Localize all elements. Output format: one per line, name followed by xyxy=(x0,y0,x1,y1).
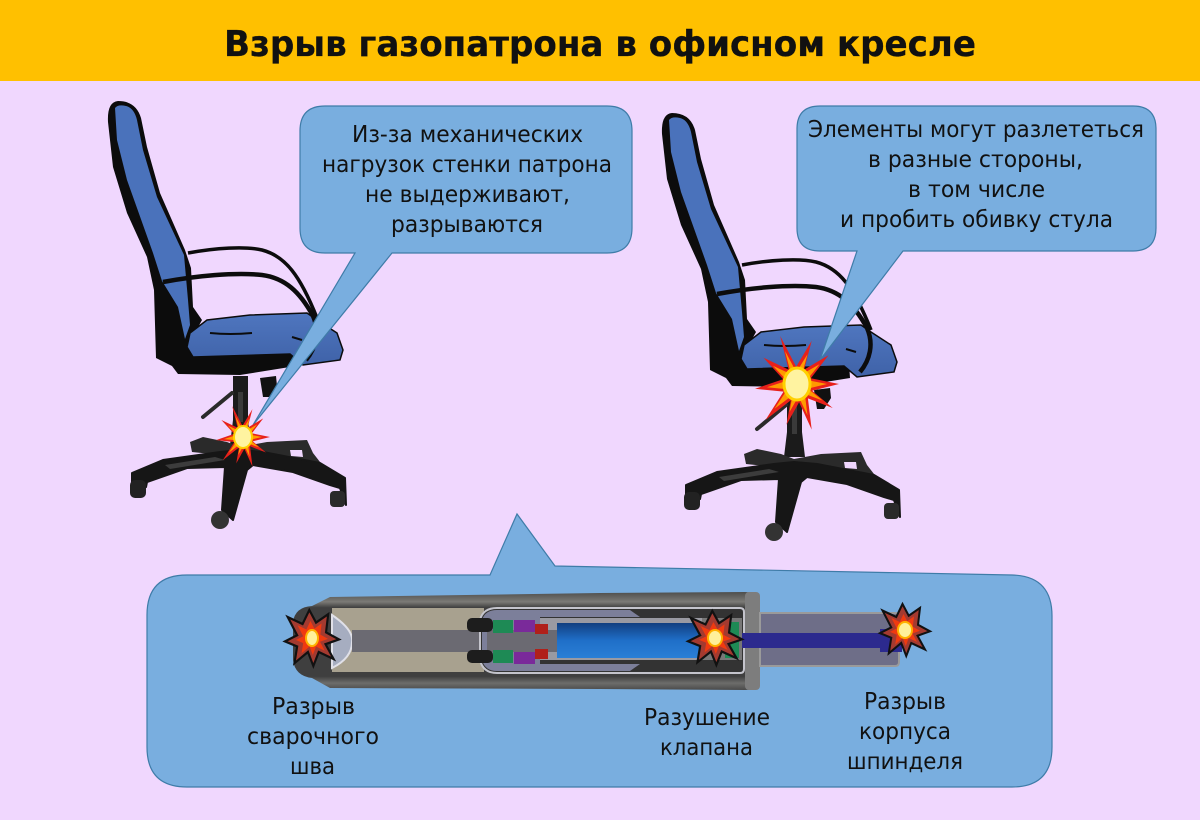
explosion on right chair under the seat xyxy=(755,336,839,430)
label: weld rupture: сварочного xyxy=(247,724,379,750)
callout text: right: Элементы могут разлететься xyxy=(808,117,1144,143)
label: valve destruction: клапана xyxy=(660,735,753,761)
gas cartridge cutaway xyxy=(293,592,902,690)
callout text: right: в том числе xyxy=(908,177,1045,203)
callout text: left: Из-за механических xyxy=(352,122,583,148)
title: Взрыв газопатрона в офисном кресле xyxy=(224,24,976,65)
callout text: left: разрываются xyxy=(391,212,543,238)
label: valve destruction: Разушение xyxy=(644,705,770,731)
callout: right xyxy=(797,106,1156,360)
callout text: right: в разные стороны, xyxy=(868,147,1083,173)
callout text: right xyxy=(808,117,1144,233)
label: weld rupture: шва xyxy=(290,754,335,780)
callout: left xyxy=(253,106,632,425)
explosion: welded seam xyxy=(285,610,339,666)
callout text: right: и пробить обивку стула xyxy=(840,207,1113,233)
explosion: spindle xyxy=(880,604,930,656)
explosion: valve xyxy=(688,611,742,665)
title banner xyxy=(0,0,1200,81)
label: spindle rupture: Разрыв xyxy=(864,689,946,715)
label: valve destruction xyxy=(644,705,770,761)
label: weld rupture: Разрыв xyxy=(272,694,355,720)
explosion on left chair at the base xyxy=(216,406,270,466)
callout text: left xyxy=(322,122,612,238)
right chair illustration xyxy=(662,113,900,541)
callout text: left: нагрузок стенки патрона xyxy=(322,152,612,178)
label: weld rupture xyxy=(247,694,379,780)
label: spindle rupture xyxy=(847,689,963,775)
label: spindle rupture: шпинделя xyxy=(847,749,963,775)
label: spindle rupture: корпуса xyxy=(859,719,951,745)
left chair illustration xyxy=(108,101,346,529)
callout text: left: не выдерживают, xyxy=(365,182,570,208)
panel: gas cartridge detail xyxy=(147,514,1052,787)
